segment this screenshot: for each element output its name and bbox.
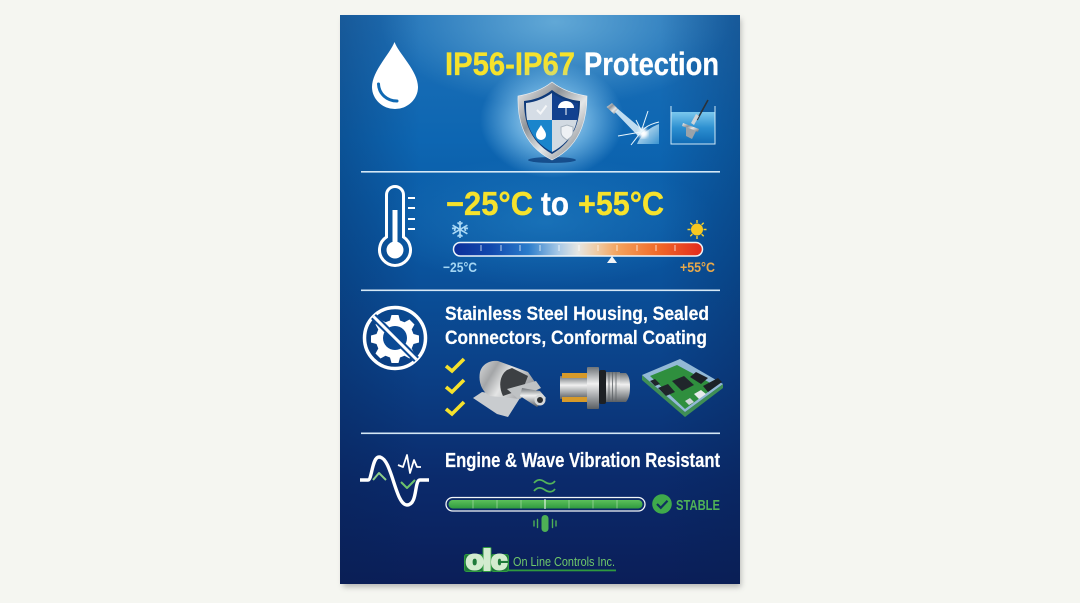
heading: temperature range: −25°C	[446, 185, 533, 222]
logo: On Line Controls	[464, 545, 616, 575]
icon: vibration waves	[360, 455, 429, 505]
marker triangle	[607, 256, 617, 263]
section: vibration	[360, 450, 720, 528]
title: IP56-IP67 Protection: Protection	[584, 46, 719, 82]
icon: sensor submerged in water tank	[671, 100, 715, 144]
image: stainless steel housing	[473, 361, 546, 417]
section: IP protection	[372, 42, 719, 178]
heading: materials: Stainless Steel Housing, Sealed	[445, 304, 709, 325]
icon: no corrosion gear	[364, 308, 426, 368]
title: IP56-IP67 Protection	[445, 46, 719, 82]
heading: temperature range	[446, 185, 664, 222]
icon: thermometer	[380, 186, 415, 265]
image: conformal coated circuit board	[642, 359, 723, 417]
heading: materials: Connectors, Conformal Coating	[445, 328, 707, 349]
icon: green sound pulse	[534, 518, 556, 528]
logo: On Line Controls: olc	[466, 545, 507, 575]
image: sealed connector	[560, 367, 630, 409]
divider	[361, 290, 720, 291]
heading: materials	[445, 304, 709, 349]
temperature gradient bar	[454, 242, 702, 256]
stability bar	[446, 498, 645, 511]
icon: snowflake	[452, 221, 468, 238]
poster shadow	[343, 19, 741, 587]
label: stable: STABLE	[676, 497, 720, 514]
heading: temperature range: to	[541, 185, 569, 222]
divider	[361, 171, 720, 173]
infographic poster on wall	[340, 15, 744, 590]
icon: green wave lines	[534, 480, 555, 492]
section: temperature range	[380, 185, 715, 275]
heading: temperature range: +55°C	[578, 185, 664, 222]
poster background panel	[340, 0, 740, 584]
label: minimum temperature: −25°C	[443, 259, 477, 275]
divider	[361, 432, 720, 434]
icon: sun	[688, 220, 706, 239]
icon: water jet on surface	[606, 103, 659, 145]
title: IP56-IP67 Protection: IP56-IP67	[445, 46, 575, 82]
icon: metal shield	[480, 62, 624, 178]
icon: water drop	[372, 42, 418, 109]
heading: vibration: Engine & Wave Vibration Resistant	[445, 450, 720, 472]
label: maximum temperature: +55°C	[680, 259, 715, 275]
logo: On Line Controls: On Line Controls Inc.	[513, 555, 615, 569]
yellow check marks	[446, 359, 464, 414]
icon: stable check badge	[652, 494, 672, 514]
section: materials	[364, 304, 723, 417]
